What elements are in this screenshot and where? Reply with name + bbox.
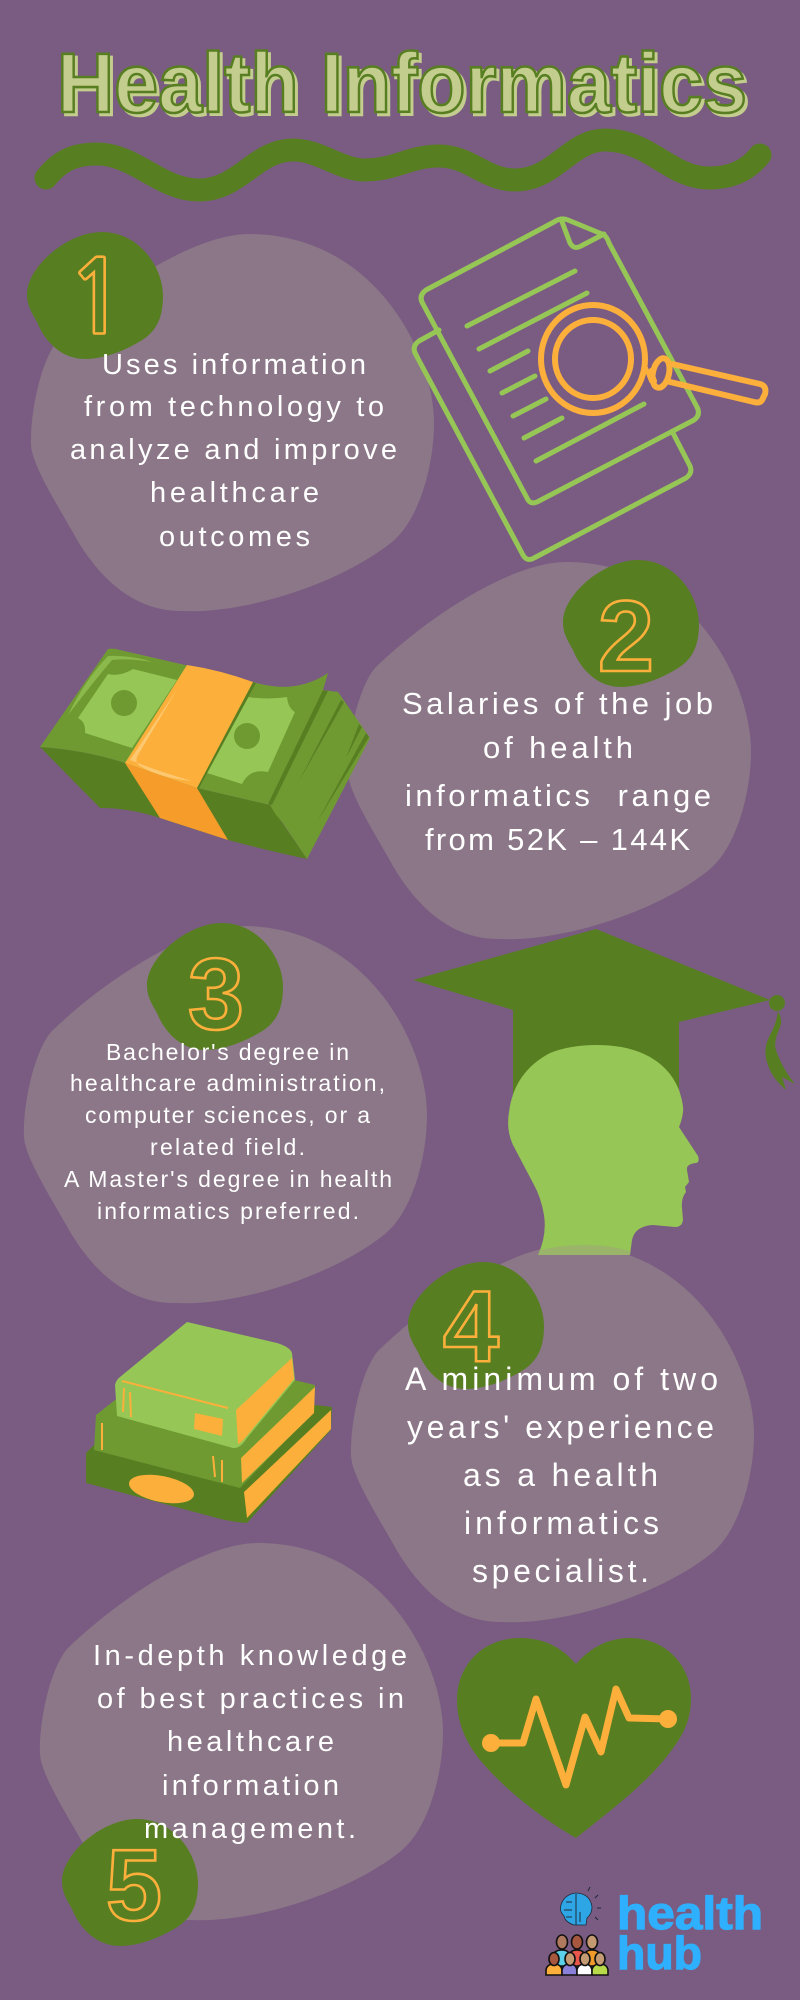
text: step 2: of health xyxy=(483,730,633,765)
text: step 3: informatics preferred. xyxy=(97,1198,359,1224)
text: step 1: healthcare xyxy=(150,477,319,509)
icon: document with magnifying glass xyxy=(414,219,765,559)
text: step 1 xyxy=(70,349,397,553)
text: step 4: specialist. xyxy=(472,1553,649,1589)
panel: step 4 xyxy=(351,1245,754,1622)
number badge 3: 3 xyxy=(188,939,244,1051)
number badge 4 xyxy=(408,1262,544,1389)
panel: step 5 xyxy=(40,1543,443,1946)
text: step 3: computer sciences, or a xyxy=(85,1102,370,1128)
logo wordmark xyxy=(617,1887,763,1979)
text: step 1: analyze and improve xyxy=(70,434,397,466)
text: step 5: of best practices in xyxy=(97,1683,404,1715)
text: step 5: management. xyxy=(144,1813,356,1845)
panel: step 3 xyxy=(24,923,427,1303)
text: step 4: A minimum of two xyxy=(405,1361,718,1397)
panel: step 2 xyxy=(348,560,751,939)
icon: stack of books xyxy=(86,1322,332,1523)
text: step 5 xyxy=(93,1640,407,1845)
number badge 2 xyxy=(563,560,699,693)
blob background 4 xyxy=(351,1245,754,1622)
number badge 4: 4 xyxy=(443,1271,499,1383)
text: step 2: informatics range xyxy=(405,778,711,813)
text: step 4: informatics xyxy=(464,1505,659,1541)
icon: stack of money xyxy=(40,649,370,859)
text: step 2: Salaries of the job xyxy=(402,686,713,721)
blob tint over neck xyxy=(538,1245,630,1255)
blob background 5 xyxy=(40,1543,443,1920)
text: step 1: Uses information xyxy=(102,349,366,381)
icon: group of people xyxy=(546,1935,608,1975)
blob background 3 xyxy=(24,926,427,1303)
number badge 1: 1 xyxy=(66,249,128,349)
text: step 1: outcomes xyxy=(159,521,310,553)
blob background 1 xyxy=(31,234,434,611)
title: Health Informatics xyxy=(57,36,747,130)
text: step 2 xyxy=(402,686,713,857)
blob background 2 xyxy=(348,562,751,939)
icon: graduate head with cap xyxy=(413,929,795,1255)
number badge 5 xyxy=(62,1819,198,1946)
text: step 4 xyxy=(405,1361,718,1589)
logo wordmark: health xyxy=(617,1887,763,1939)
text: step 5: In-depth knowledge xyxy=(93,1640,407,1672)
wavy divider xyxy=(46,140,760,190)
number badge 1 xyxy=(27,232,163,359)
text: step 3: Bachelor's degree in xyxy=(106,1039,349,1065)
text: step 4: as a health xyxy=(463,1457,658,1493)
number badge 3 xyxy=(147,923,283,1051)
text: step 5: healthcare xyxy=(167,1726,334,1758)
text: step 3: related field. xyxy=(150,1134,305,1160)
logo wordmark: hub xyxy=(617,1927,702,1979)
icon: brain bulb xyxy=(560,1887,601,1925)
panel: step 1 xyxy=(27,232,434,611)
number badge 2: 2 xyxy=(598,581,654,693)
text: step 3: A Master's degree in health xyxy=(64,1166,392,1192)
text: step 4: years' experience xyxy=(407,1409,714,1445)
text: step 5: information xyxy=(162,1770,339,1802)
logo: health hub xyxy=(546,1887,763,1979)
number badge 5: 5 xyxy=(106,1830,162,1942)
text: step 1: from technology to xyxy=(84,391,384,423)
icon: heart with heartbeat line xyxy=(457,1638,691,1838)
text: step 3: healthcare administration, xyxy=(70,1070,385,1096)
text: step 3 xyxy=(64,1039,392,1224)
title: Health Informatics xyxy=(60,39,750,133)
text: step 2: from 52K – 144K xyxy=(425,822,690,857)
